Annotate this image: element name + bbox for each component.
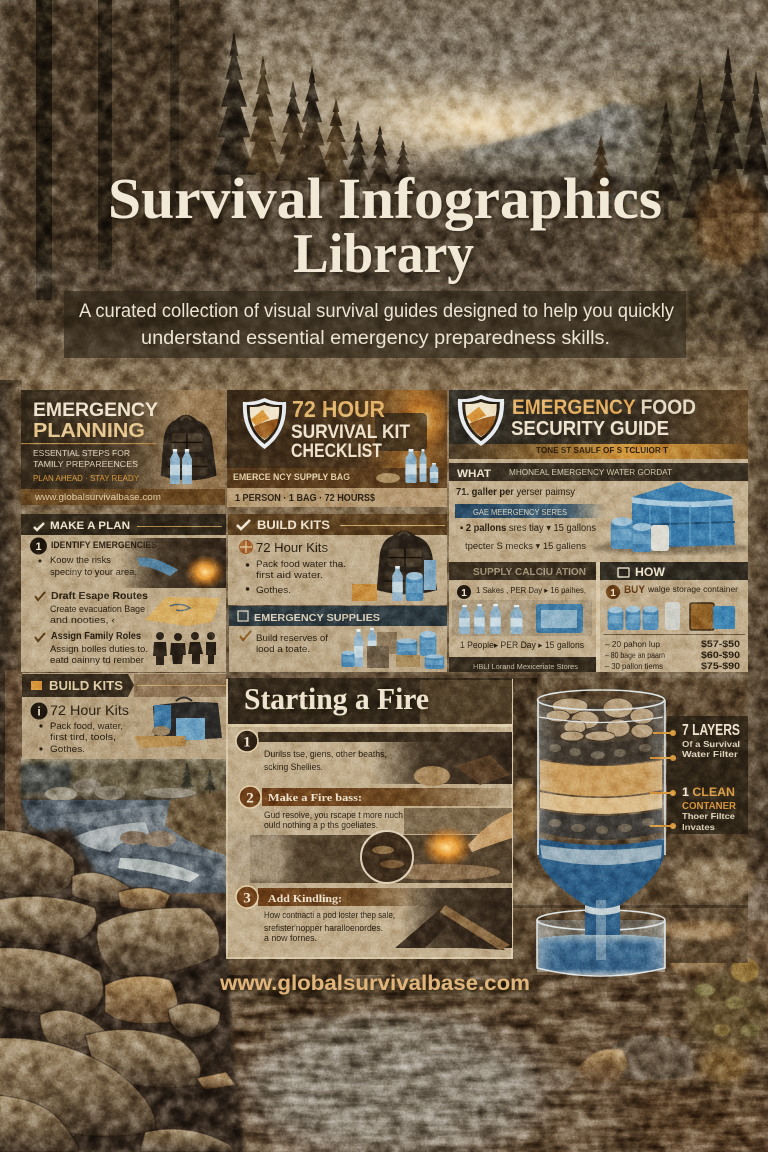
icon: checkmark [237, 520, 250, 529]
panel: emergency food security guide: GAE MEERGENCY SERES [473, 508, 567, 517]
sub-panel: how: – 30 pallon tiems [605, 661, 663, 671]
background: dark bed under left rocks [0, 828, 245, 1152]
step 2: ould nothing a p ths goeliates. [264, 820, 378, 830]
panel: emergency planning: ESSENTIAL STEPS FOR [33, 448, 130, 458]
panel: emergency food security guide [449, 390, 748, 672]
title: Survival Infographics [108, 166, 662, 231]
callout: clean container label: 1 CLEAN [682, 785, 735, 799]
panel: make a plan: Create evacuation Bage [50, 604, 145, 614]
panel: emergency food security guide: SECURITY GUIDE [511, 418, 669, 440]
panel: build kits lower: i [37, 704, 41, 718]
image: fire and water hazard [120, 538, 226, 589]
step 2 [239, 786, 512, 830]
sub-panel: supply calculation: 1 People▸ PER Day ▸ 15 gallons [460, 640, 584, 650]
image: kindling shelter [395, 888, 512, 950]
background: rocks bottom left [0, 830, 236, 1152]
sub-panel: how [600, 562, 748, 671]
panel: make a plan: and nooties, ‹ [50, 615, 115, 625]
website url: www.globalsurvivalbase.com [219, 972, 530, 995]
panel: emergency food security guide: tpecter S mecks ▾ 15 gallens [465, 541, 586, 552]
panel: emergency food security guide: ▪ 2 pallons sres tiay ▾ 15 gallons [460, 523, 596, 534]
panel: 72 hour survival kit checklist: SURVIVAL KIT [291, 422, 410, 443]
icon: shield badge [243, 398, 286, 449]
panel: build kits lower [22, 673, 226, 759]
subtitle band [64, 291, 686, 358]
illustration: layered water filter [537, 690, 665, 976]
panel: build kits and 72 hour kits: first aid water. [256, 570, 323, 581]
panel: make a plan: MAKE A PLAN [50, 520, 130, 532]
background: rock face behind filter [505, 678, 755, 963]
panel: make a plan: Assign Family Roles [51, 630, 141, 642]
panel: make a plan [21, 514, 226, 672]
image: rock and wood pile [370, 732, 512, 786]
sub-panel: supply calculation: 1 [461, 588, 467, 599]
callout: 7 layers label [682, 722, 740, 759]
panel: make a plan: eatd oainny td rember [50, 655, 144, 665]
title: Library [293, 223, 474, 285]
sub-panel: supply calculation: 1 Sakes , PER Day ▸ 16 paihes, [476, 585, 586, 595]
background: ground path [0, 955, 768, 1152]
panel: build kits lower: Pack food, water, [50, 721, 123, 732]
panel: emergency supplies: lood a toate. [256, 644, 310, 655]
sub-panel: how: HOW [635, 565, 666, 579]
sub-panel: supply calculation: SUPPLY CALCIU ATION [473, 567, 586, 578]
panel: emergency planning: PLAN AHEAD · STAY READY [33, 474, 140, 483]
callout: 7 layers label: 7 LAYERS [682, 722, 740, 739]
panel: build kits and 72 hour kits [228, 514, 447, 605]
panel: 72 hour survival kit checklist: 72 HOUR [292, 396, 385, 422]
step 1: Durilss tse, giens, other beaths, [264, 749, 387, 759]
callout: clean container label: CONTANER [682, 801, 737, 812]
panel: emergency supplies [229, 606, 447, 672]
panel: 72 hour survival kit checklist: 1 PERSON · 1 BAG · 72 HOURS$ [235, 493, 375, 504]
panel: emergency supplies: Build reserves of [256, 633, 328, 644]
step 1 [236, 730, 448, 772]
dark gravel layer lower [540, 810, 662, 840]
panel: make a plan: Assign bolles duties to. [50, 644, 148, 654]
panel: emergency planning: www.globalsurvivalbase.com [34, 492, 161, 503]
panel: emergency planning: EMERGENCY [33, 400, 158, 421]
sub-panel: how: – 20 pahon lup [605, 639, 660, 649]
sub-panel: how: – 80 bage an paarn [605, 650, 665, 660]
sub-panel: how: walge storage container [647, 584, 738, 594]
panel: build kits and 72 hour kits: Pack food water tha. [256, 559, 346, 570]
step 3: Add Kindling: [268, 893, 342, 905]
sub-panel: how: $75-$90 [701, 661, 740, 671]
subtitle: understand essential emergency preparedness skills. [141, 327, 610, 349]
panel: build kits and 72 hour kits: Gothes. [256, 585, 291, 596]
panel: emergency supplies: EMERGENCY SUPPLIES [254, 612, 380, 624]
callout: clean container label: Invates [682, 822, 715, 832]
callout: clean container label [682, 785, 737, 832]
panel: build kits lower: BUILD KITS [49, 679, 123, 693]
lower glass [537, 910, 665, 976]
callout: 7 layers label: Of a Survival [682, 739, 740, 749]
image: fire pit with hand [228, 808, 512, 884]
sub-panel: how: BUY [624, 584, 646, 596]
panel: emergency food security guide: WHAT [457, 468, 491, 480]
sub-panel: how: 1 [610, 588, 616, 599]
step 3: srefister'nopper haralloenordes. [264, 923, 383, 933]
panel: build kits lower: first tird, tools, [50, 732, 116, 743]
step 3 [236, 886, 428, 943]
sand layer [540, 760, 662, 796]
sub-panel: supply calculation: HBLI Lorand Mexiceriate Stores [473, 662, 578, 671]
icon: family silhouettes [153, 632, 216, 665]
icon: blue water tanks [592, 482, 748, 554]
rock layer [546, 698, 654, 741]
icon: supply pile [341, 628, 444, 669]
panel: make a plan: Draft Esape Routes [51, 590, 148, 602]
step 3: 3 [243, 890, 251, 906]
icon: blue duffel bag [134, 698, 222, 748]
subtitle: A curated collection of visual survival guides designed to help you quickly [79, 300, 674, 322]
callouts: filter connectors [650, 730, 676, 829]
icon: water containers [376, 449, 438, 483]
step 2: Make a Fire bass: [268, 792, 362, 804]
panel: build kits and 72 hour kits: BUILD KITS [257, 518, 330, 532]
icon: map [145, 597, 220, 626]
panel: build kits and 72 hour kits: 72 Hour Kits [256, 540, 328, 555]
gravel texture [549, 744, 654, 834]
cylinder body [538, 700, 665, 752]
panel: build kits lower: Gothes. [50, 744, 85, 755]
step 3: a now fornes. [264, 933, 317, 943]
step 1: scking Shellies. [264, 762, 323, 772]
callout: clean container label: Thoer Filtce [682, 811, 735, 821]
panel: emergency planning [21, 390, 225, 505]
panel: make a plan: Koow the risks [50, 555, 112, 565]
panel: filter label background [667, 716, 748, 834]
light sand layer [540, 792, 662, 814]
background: rocks and foliage bottom right [544, 876, 768, 1090]
sub-panel: how: $57-$50 [701, 639, 740, 649]
panel: make a plan: IDENTIFY EMERGENCIES [51, 540, 157, 550]
panel: starting a fire: Starting a Fire [244, 681, 429, 716]
panel: 72 hour survival kit checklist: CHECKLIST [291, 441, 382, 462]
sub-panel: supply calculation [449, 562, 600, 672]
texture overlay: ground streaks [0, 975, 768, 1152]
panel: make a plan: speciny to your area. [50, 567, 137, 577]
panel: emergency food security guide: 71. galler per yerser paimsy [456, 487, 575, 498]
panel: emergency food security guide: MHONEAL EMERGENCY WATER GORDAT [509, 468, 672, 477]
panel: emergency planning: TAMILY PREPAREENCES [33, 459, 138, 469]
panel: 72 hour survival kit checklist: EMERCE NCY SUPPLY BAG [233, 472, 350, 482]
icon: backpack with water and box [352, 531, 437, 601]
funnel bottle [538, 838, 664, 960]
subtitle [79, 300, 674, 349]
icon: backpack and bottles [161, 415, 217, 484]
panel: starting a fire [227, 678, 512, 958]
icon: shield badge [458, 395, 504, 446]
step 1: 1 [243, 734, 251, 750]
panel: emergency food security guide: TONE ST SAULF OF S TCLUIOR T [536, 446, 668, 455]
callout: 7 layers label: Water Filter [682, 749, 739, 759]
panel: emergency food security guide: EMERGENCY FOOD [512, 396, 696, 419]
dark gravel layer upper [540, 735, 662, 765]
panel: 72 hour survival kit checklist [227, 390, 451, 507]
icon: checkmark [34, 523, 44, 530]
glass walls [538, 690, 665, 855]
sub-panel: how: $60-$90 [701, 650, 740, 660]
panel: build kits lower: 72 Hour Kits [50, 702, 129, 718]
background: pine tree lines [0, 0, 768, 345]
title [108, 166, 662, 285]
step 2: 2 [246, 790, 254, 806]
background: side walls [0, 380, 768, 880]
step 3: How contnacti a pod loster thep sale, [264, 910, 395, 920]
panel: emergency planning: PLANNING [33, 420, 145, 442]
step 2: Gud resolve, you rscape t more nuch [264, 810, 403, 820]
panel: make a plan: 1 [35, 541, 42, 553]
image: forest stream [21, 758, 226, 893]
